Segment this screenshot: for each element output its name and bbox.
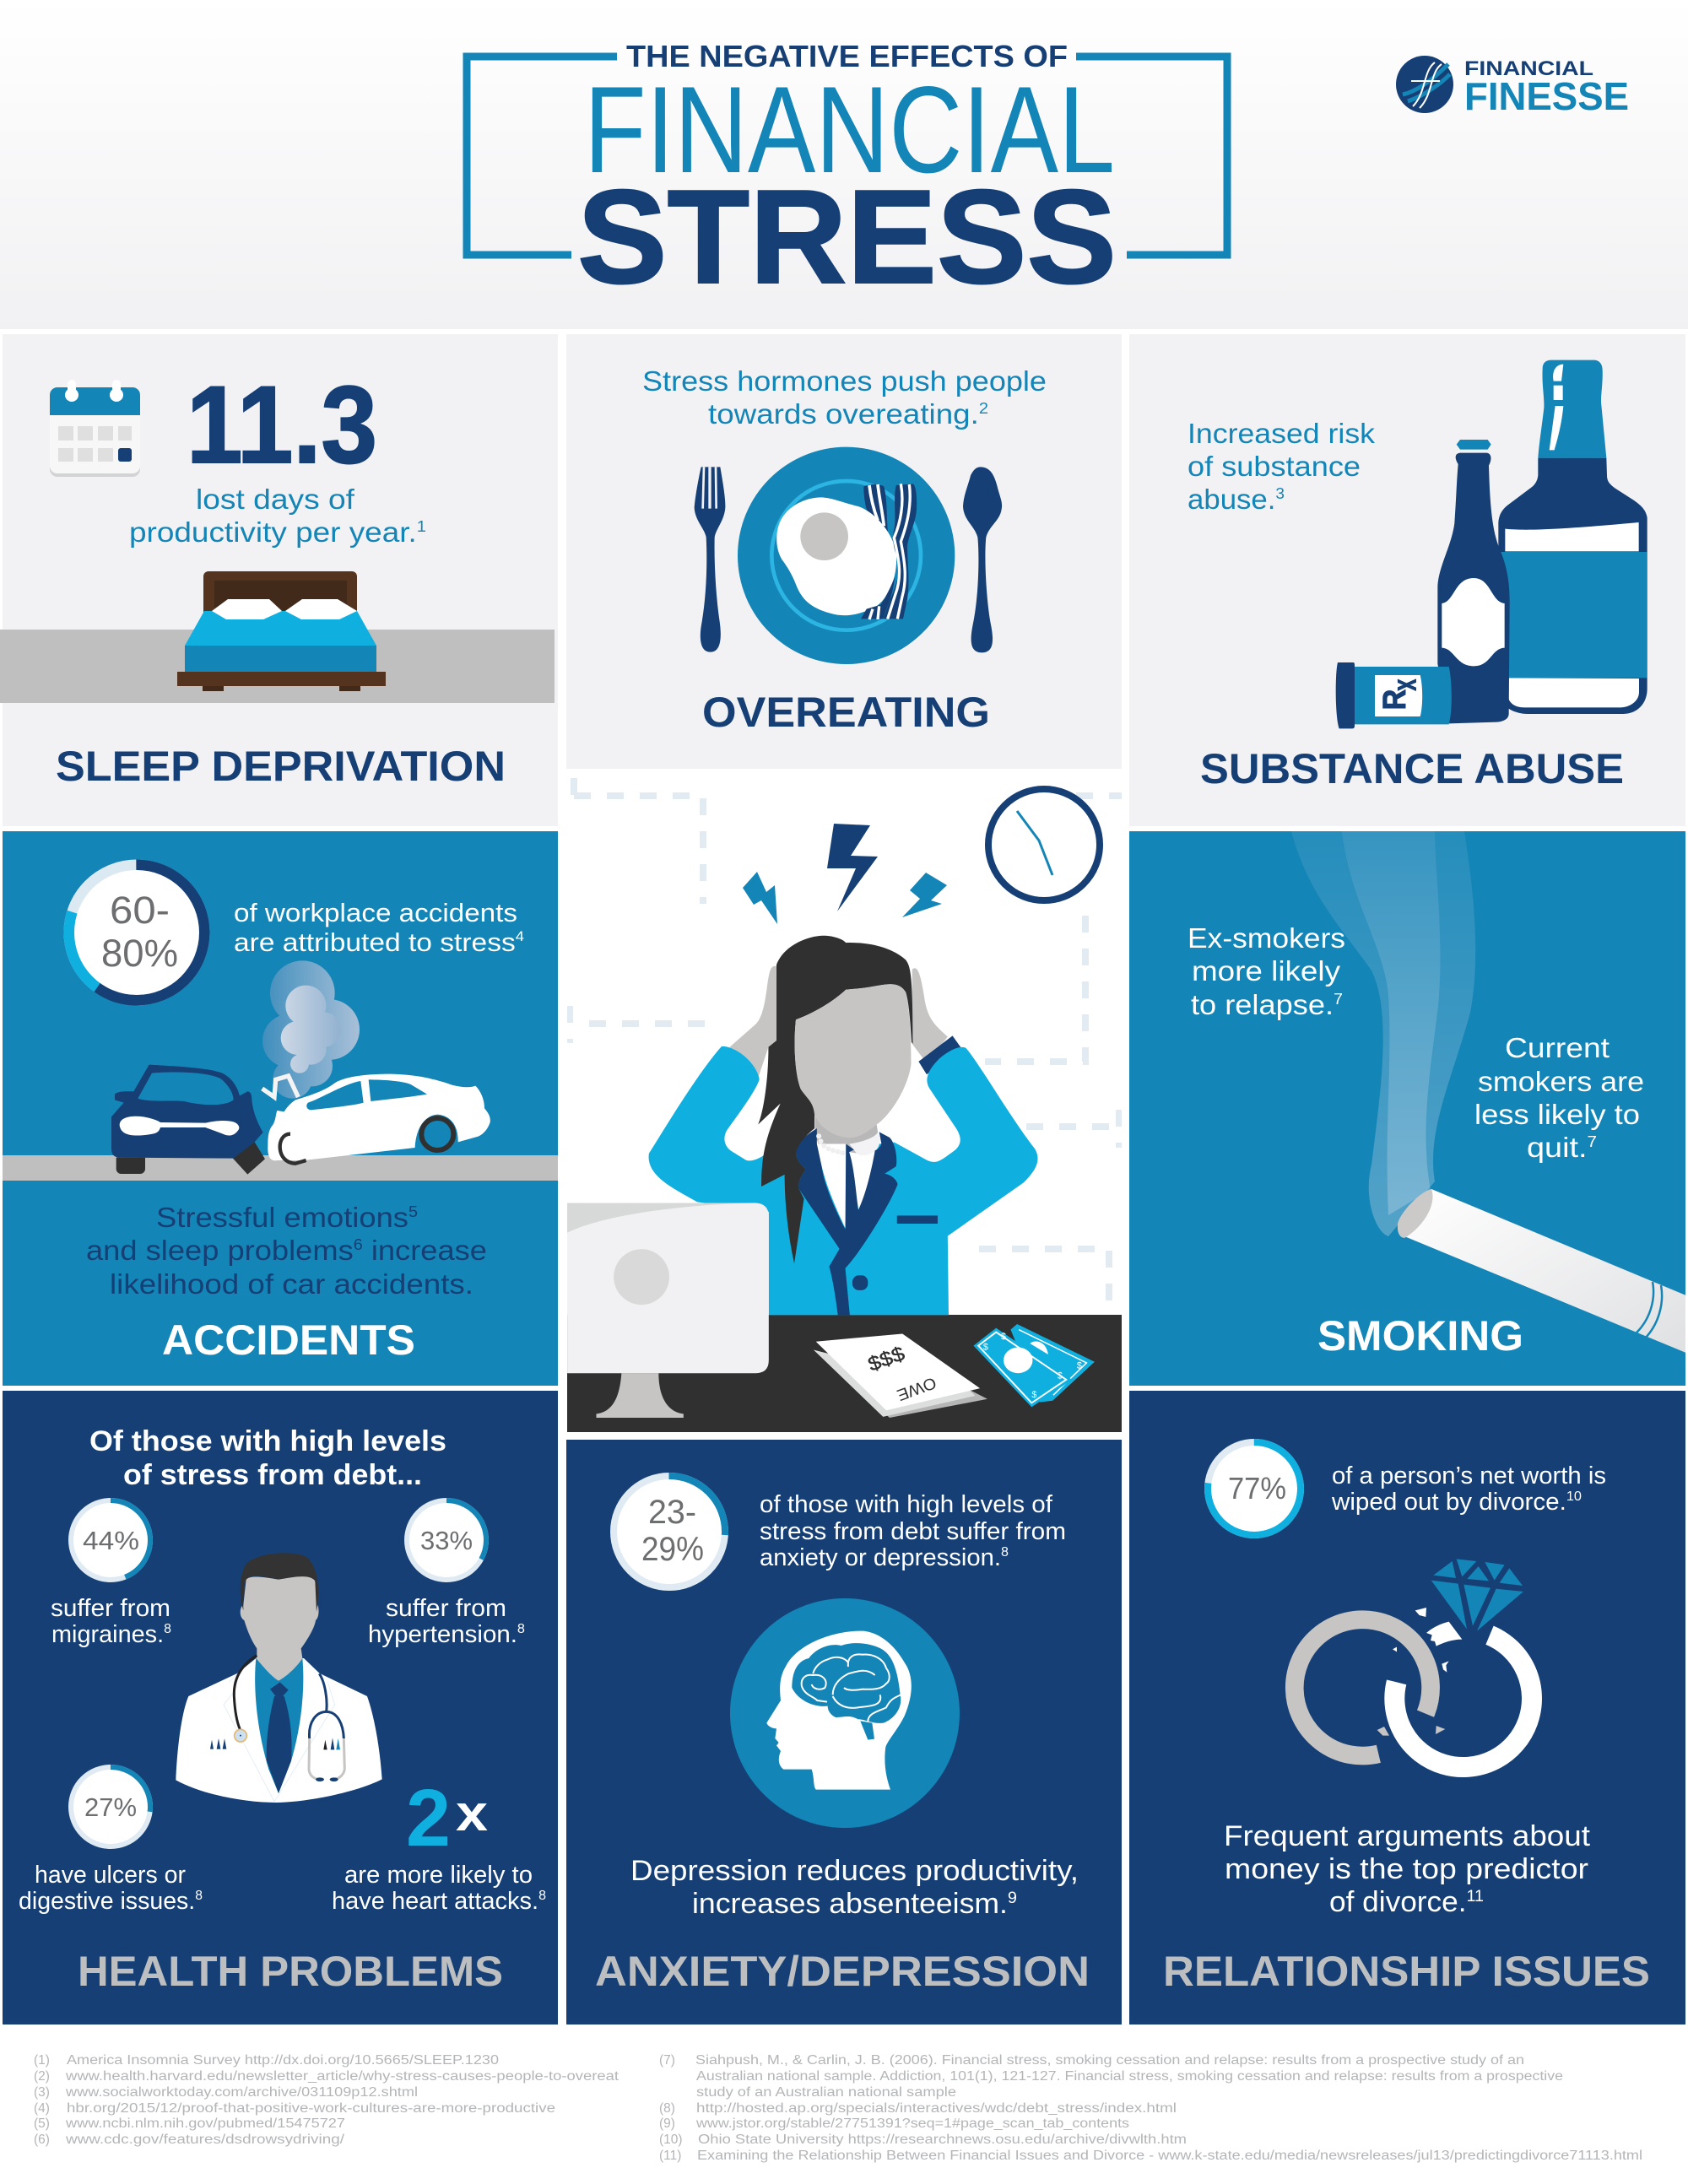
woman figure <box>649 936 1038 1315</box>
blue car <box>111 1065 265 1175</box>
body text: ex-smokers: Ex-smokers <box>1188 922 1345 954</box>
panel: accidents <box>3 831 558 1386</box>
footnotes: right column <box>659 2053 1642 2163</box>
body text: Depression reduces productivity, <box>630 1855 1079 1887</box>
body text: workplace accidents: 4 <box>516 928 524 944</box>
logo mark <box>1396 56 1453 113</box>
body text: car accidents: likelihood of car accidents. <box>110 1268 473 1300</box>
body text <box>642 365 1047 430</box>
ring chart: 27% <box>71 1767 150 1846</box>
body text: 8 <box>1001 1545 1009 1560</box>
body text: arguments <box>1224 1820 1591 1918</box>
paper bill: OWE <box>895 1373 939 1403</box>
stat: 11.3: 11.3 <box>187 363 377 486</box>
intro text <box>89 1425 446 1491</box>
ring chart: 60-80% <box>69 865 204 1000</box>
logo wordmark: FINANCIAL <box>1464 57 1593 80</box>
caption: ulcers: have ulcers or <box>35 1862 186 1889</box>
body text: 9 <box>1008 1889 1017 1907</box>
body text: ex-smokers: to relapse. <box>1191 989 1321 1020</box>
heading: SLEEP DEPRIVATION <box>56 743 506 790</box>
dashed office lines <box>570 778 1122 1303</box>
caption: heart attacks: are more likely to <box>344 1862 533 1889</box>
icon: broken rings <box>1295 1559 1532 1767</box>
icon: head with brain <box>730 1598 960 1828</box>
body text: 2 <box>979 400 988 417</box>
front bacon strip <box>861 484 917 619</box>
caption: migraines: suffer from <box>51 1595 170 1622</box>
logo <box>1396 56 1629 118</box>
money: $ <box>983 1343 988 1353</box>
ring chart: 33% <box>407 1500 486 1580</box>
caption: ulcers <box>19 1862 203 1915</box>
icon: fork <box>695 467 725 652</box>
paper bill: $$$ <box>865 1343 908 1376</box>
ring chart: 60-80%: 60- <box>110 889 170 932</box>
body text: net worth: wiped out by divorce. <box>1332 1489 1561 1516</box>
footnotes: left column: (6) <box>34 2133 50 2147</box>
money: $ <box>1031 1390 1036 1400</box>
title <box>467 39 1227 311</box>
panel: sleep deprivation <box>0 334 558 826</box>
body text: workplace accidents: of workplace accidents <box>234 898 517 927</box>
paper bill <box>814 1334 987 1418</box>
icon: lightning bolts <box>743 824 947 924</box>
footnotes: left column: www.socialworktoday.com/archive/031109p12.shtml <box>65 2085 418 2100</box>
money: $ <box>1001 1332 1006 1342</box>
footnotes: left column: (2) <box>34 2069 50 2084</box>
footnotes: left column: (1) <box>34 2053 50 2068</box>
body text: of substance <box>1188 451 1361 482</box>
ring chart: 44%: 44% <box>83 1526 139 1555</box>
stat: 2x <box>406 1773 488 1863</box>
money: $ <box>1058 1371 1063 1381</box>
body text <box>760 1491 1066 1571</box>
stat caption: lost days of <box>196 484 355 515</box>
body text: increases absenteeism. <box>692 1888 993 1920</box>
footnotes: right column: (11) <box>659 2149 681 2163</box>
caption: hypertension: hypertension. <box>368 1621 515 1648</box>
footnotes: right column: http://hosted.ap.org/specials/interactives/wdc/debt_stress/index.html <box>696 2101 1177 2116</box>
body text: ex-smokers: more likely <box>1192 955 1341 987</box>
footnotes: left column: www.cdc.gov/features/dsdrowsydriving/ <box>65 2133 345 2147</box>
ring chart: 44% <box>71 1500 150 1580</box>
body text: current smokers: smokers are <box>1478 1066 1644 1097</box>
body text: abuse. <box>1188 484 1271 515</box>
body text: arguments: Frequent arguments about <box>1224 1820 1591 1852</box>
rx mark <box>1377 679 1423 710</box>
caption: ulcers: 8 <box>195 1889 203 1903</box>
heading: ACCIDENTS <box>162 1316 415 1364</box>
ring chart: 77% <box>1208 1442 1301 1535</box>
heading: SMOKING <box>1317 1312 1523 1360</box>
caption: hypertension: suffer from <box>386 1595 506 1622</box>
body text: anxiety or depression. <box>760 1544 999 1571</box>
icon: car crash <box>111 960 490 1175</box>
ring chart: 23-29% <box>614 1476 725 1587</box>
footnotes: left column <box>34 2053 619 2147</box>
intro text: of stress from debt... <box>123 1459 422 1491</box>
stat caption: 1 <box>417 518 426 535</box>
footnotes: left column: (3) <box>34 2085 50 2100</box>
body text: car accidents: 6 <box>354 1236 363 1253</box>
money: $ <box>1077 1360 1082 1370</box>
icon: smoke <box>1291 831 1475 1236</box>
stat: 2x: 2 <box>406 1773 451 1863</box>
body text: net worth: 10 <box>1566 1489 1582 1504</box>
body text: 3 <box>1275 485 1285 502</box>
footnotes: right column: (8) <box>659 2101 675 2116</box>
footnotes: left column: www.ncbi.nlm.nih.gov/pubmed/15475727 <box>65 2116 345 2131</box>
panel: smoking <box>1129 831 1688 1386</box>
heading: HEALTH PROBLEMS <box>78 1948 503 1995</box>
body text: car accidents <box>86 1202 487 1300</box>
caption: migraines: 8 <box>164 1622 171 1636</box>
heading: OVEREATING <box>702 689 990 736</box>
body text: net worth: of a person’s net worth is <box>1332 1462 1606 1489</box>
body text: current smokers: quit. <box>1527 1132 1579 1163</box>
title frame <box>467 57 1227 255</box>
footnotes: right column: (10) <box>659 2133 683 2147</box>
footnotes: right column: (9) <box>659 2116 675 2131</box>
ring chart: 23-29%: 23- <box>648 1494 696 1531</box>
caption: hypertension: 8 <box>517 1622 525 1636</box>
intro text: Of those with high levels <box>89 1425 446 1457</box>
stat: 2x: x <box>456 1785 488 1841</box>
desk <box>567 1315 1122 1432</box>
body text: towards overeating. <box>708 398 951 430</box>
heading: SUBSTANCE ABUSE <box>1200 745 1624 792</box>
body text: net worth <box>1331 1462 1606 1516</box>
footnotes: left column: www.health.harvard.edu/newsletter_article/why-stress-causes-people-to-overeat <box>65 2069 619 2084</box>
body text <box>1188 418 1376 515</box>
road <box>3 1155 558 1181</box>
computer monitor <box>567 1203 769 1418</box>
body text: Stress hormones push people <box>642 365 1047 397</box>
caption: hypertension <box>368 1595 525 1648</box>
header background <box>0 0 1688 329</box>
ring chart: 23-29%: 29% <box>641 1531 704 1568</box>
footnotes: left column: (4) <box>34 2101 50 2116</box>
ring chart: 60-80%: 80% <box>101 932 178 975</box>
body text: of those with high levels of <box>760 1491 1053 1518</box>
body text: current smokers <box>1474 1032 1644 1163</box>
body text: ex-smokers <box>1188 922 1345 1020</box>
ring chart: 33%: 33% <box>420 1526 473 1555</box>
footnotes: right column: Australian national sample. Addiction, 101(1), 121-127. Financial stress, smoking cessation and relapse: results from a prospective <box>696 2069 1563 2084</box>
body text: current smokers: 7 <box>1588 1133 1597 1150</box>
icon: doctor <box>176 1553 382 1803</box>
panel: relationship issues <box>1129 1391 1685 2025</box>
stat caption <box>129 484 426 548</box>
icon: cigarette <box>1398 1189 1688 1354</box>
stat caption: productivity per year. <box>129 516 386 548</box>
title line 2: FINANCIAL <box>584 61 1115 198</box>
title line 3: STRESS <box>577 163 1117 311</box>
footnotes: left column: America Insomnia Survey http://dx.doi.org/10.5665/SLEEP.1230 <box>67 2053 499 2068</box>
icon: bed <box>177 571 386 691</box>
footnotes: right column: (7) <box>659 2053 675 2068</box>
footnotes: left column: hbr.org/2015/12/proof-that-positive-work-cultures-are-more-productive <box>67 2101 555 2116</box>
panel: anxiety and depression <box>566 1440 1122 2025</box>
body text: current smokers: Current <box>1505 1032 1610 1063</box>
body text: car accidents: and sleep problems <box>86 1235 329 1266</box>
panel: health problems <box>3 1391 558 2025</box>
panel: stressed woman illustration <box>566 769 1122 1432</box>
footnotes: right column: Examining the Relationship Between Financial Issues and Divorce - www.k-state.edu/media/newsreleases/jul13/predictingdivorce71113.html <box>697 2149 1642 2163</box>
footnotes: right column: study of an Australian national sample <box>696 2085 956 2100</box>
body text: arguments: 11 <box>1467 1888 1484 1906</box>
caption: heart attacks: 8 <box>538 1889 546 1903</box>
heading: ANXIETY/DEPRESSION <box>595 1948 1090 1995</box>
body text: stress from debt suffer from <box>760 1518 1066 1545</box>
body text: car accidents: 5 <box>408 1203 418 1220</box>
caption: migraines: migraines. <box>51 1621 165 1648</box>
logo: FINESSE <box>1464 74 1629 118</box>
caption: ulcers: digestive issues. <box>19 1888 198 1915</box>
caption: heart attacks <box>332 1862 546 1915</box>
body text: workplace accidents: are attributed to stress <box>234 927 494 957</box>
rx mark: x <box>1386 679 1423 691</box>
body text: car accidents: Stressful emotions <box>156 1202 385 1233</box>
body text <box>630 1855 1079 1920</box>
white car <box>262 1074 490 1164</box>
ring chart: 27%: 27% <box>84 1792 137 1822</box>
back bacon strip <box>863 484 888 534</box>
icon: bottles <box>1336 360 1647 728</box>
body text: Increased risk <box>1188 418 1376 449</box>
body text: current smokers: less likely to <box>1474 1099 1640 1130</box>
icon: clock <box>988 789 1100 900</box>
ring chart: 77%: 77% <box>1228 1471 1286 1506</box>
icon: spoon <box>963 467 1002 652</box>
body text: car accidents: increase <box>363 1235 487 1266</box>
heading: RELATIONSHIP ISSUES <box>1163 1948 1650 1995</box>
body text: ex-smokers: 7 <box>1334 991 1343 1008</box>
smoke <box>262 960 360 1099</box>
body text: workplace accidents <box>234 898 524 957</box>
footnotes: right column: Ohio State University https://researchnews.osu.edu/archive/divwlth.htm <box>698 2133 1187 2147</box>
footnotes: left column: (5) <box>34 2116 50 2131</box>
footnotes: right column: www.jstor.org/stable/27751391?seq=1#page_scan_tab_contents <box>695 2116 1129 2131</box>
icon: calendar <box>50 380 140 477</box>
floor band <box>0 630 555 703</box>
body text: arguments: money is the top predictor <box>1225 1853 1588 1885</box>
money <box>973 1324 1095 1407</box>
panel: substance abuse <box>1129 334 1685 826</box>
caption: heart attacks: have heart attacks. <box>332 1888 538 1915</box>
panel: overeating <box>566 334 1122 769</box>
footnotes: right column: Siahpush, M., & Carlin, J. B. (2006). Financial stress, smoking cessation and relapse: results from a prospective study of an <box>695 2053 1524 2068</box>
rx mark: R <box>1377 689 1413 710</box>
icon: plate with egg and bacon <box>738 447 955 664</box>
title line 1: THE NEGATIVE EFFECTS OF <box>626 39 1068 73</box>
caption: migraines <box>51 1595 171 1648</box>
body text: arguments: of divorce. <box>1329 1886 1462 1918</box>
